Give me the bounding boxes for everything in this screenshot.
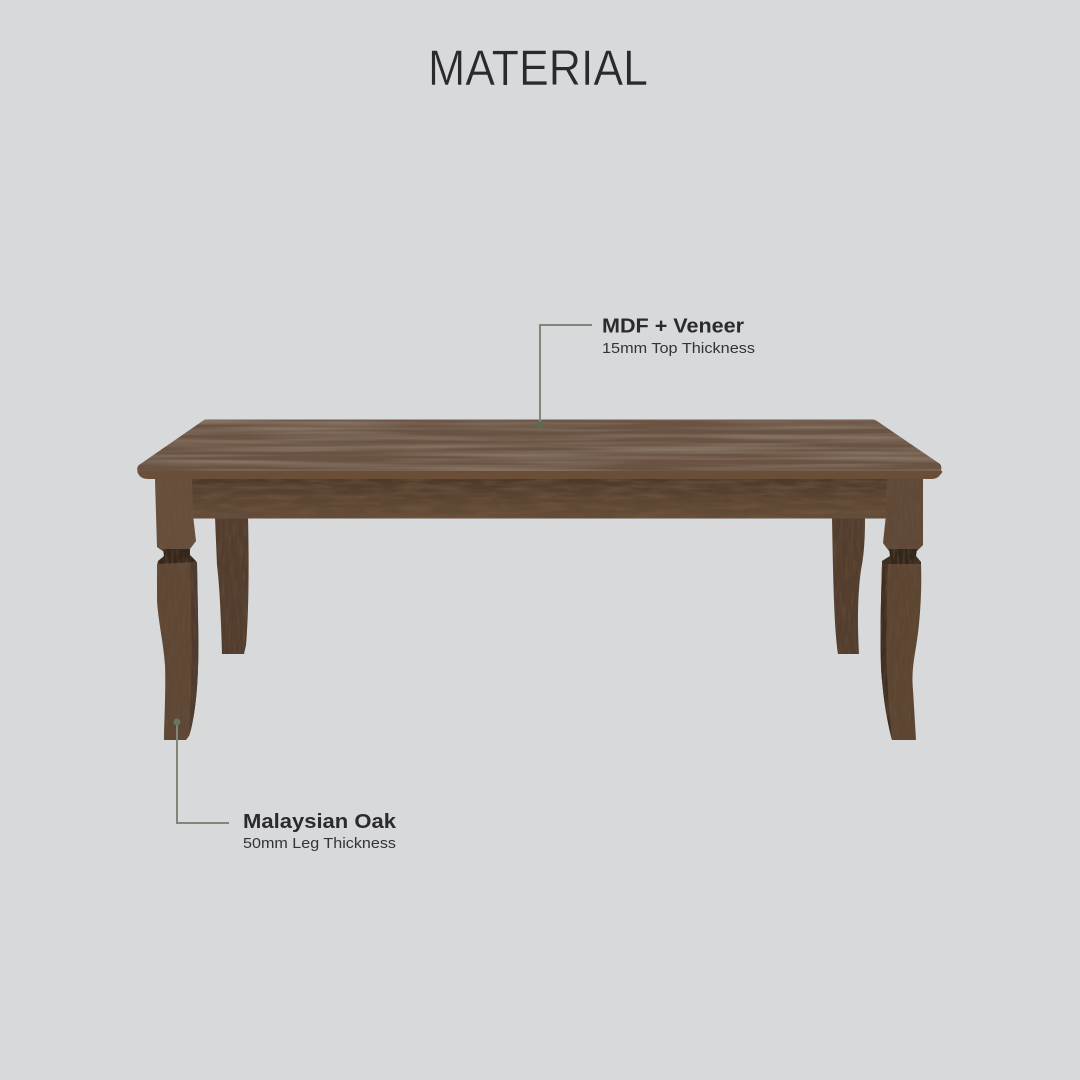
back left leg [215, 517, 249, 654]
label heading: Malaysian Oak [243, 811, 397, 833]
label detail: 15mm Top Thickness [602, 340, 755, 357]
leader line [177, 722, 229, 823]
label detail: 50mm Leg Thickness [243, 835, 396, 852]
back right leg [832, 517, 865, 654]
label heading: MDF + Veneer [602, 316, 744, 338]
title: MATERIAL [428, 40, 648, 96]
leader line [540, 325, 592, 425]
anchor dot [174, 718, 180, 726]
anchor dot [536, 422, 544, 428]
tabletop underside shadow [155, 478, 923, 482]
front left leg [155, 479, 198, 740]
front right leg [881, 479, 923, 740]
callout: Malaysian Oak [174, 718, 397, 852]
callout: MDF + Veneer [536, 316, 755, 428]
tabletop surface [137, 420, 941, 472]
table illustration [137, 420, 942, 740]
apron [190, 478, 888, 518]
tabletop front edge [137, 471, 942, 479]
